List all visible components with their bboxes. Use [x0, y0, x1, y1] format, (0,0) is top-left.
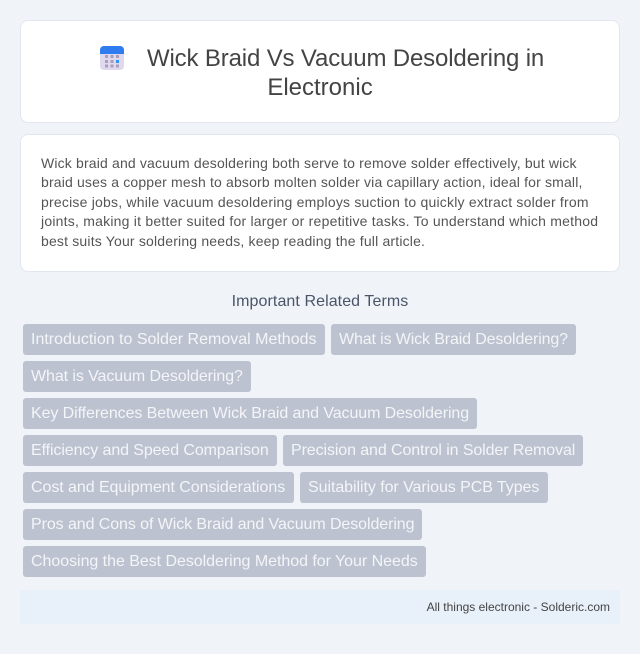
tag: Key Differences Between Wick Braid and Vacuum Desoldering: [31, 405, 469, 422]
tag: [23, 509, 422, 540]
icon: calendar: [100, 46, 124, 70]
tag: [23, 361, 251, 392]
tag: [331, 324, 576, 355]
tag: Precision and Control in Solder Removal: [291, 442, 575, 459]
tag: Pros and Cons of Wick Braid and Vacuum Desoldering: [31, 516, 414, 533]
tag: Introduction to Solder Removal Methods: [31, 331, 316, 348]
heading: related terms: Important Related Terms: [232, 293, 408, 310]
tag: [23, 472, 294, 503]
panel: title header: [20, 20, 620, 123]
intro text: braid uses a copper mesh to absorb molten solder via capillary action, ideal for small,: [41, 174, 583, 190]
tag: Choosing the Best Desoldering Method for Your Needs: [31, 553, 418, 570]
intro text: joints, making it better suited for larger or repetitive tasks. To understand which method: [41, 213, 598, 229]
tag: Cost and Equipment Considerations: [31, 479, 285, 496]
tag: [23, 546, 426, 577]
tag: [23, 324, 325, 355]
intro text: best suits Your soldering needs, keep reading the full article.: [41, 233, 425, 249]
tag: [23, 435, 277, 466]
tag: What is Vacuum Desoldering?: [31, 368, 243, 385]
tag: [23, 398, 477, 429]
title: Wick Braid Vs Vacuum Desoldering in: [147, 45, 544, 72]
title: [147, 45, 544, 101]
title: Electronic: [267, 74, 373, 101]
tag: [300, 472, 548, 503]
intro text: Wick braid and vacuum desoldering both serve to remove solder effectively, but wick: [41, 155, 577, 171]
panel: intro paragraph: [20, 134, 620, 272]
footer: [20, 590, 620, 624]
tag: What is Wick Braid Desoldering?: [339, 331, 568, 348]
tag: [283, 435, 583, 466]
intro text: precise jobs, while vacuum desoldering employs suction to quickly extract solder from: [41, 194, 589, 210]
tag: Efficiency and Speed Comparison: [31, 442, 269, 459]
tag: Suitability for Various PCB Types: [308, 479, 539, 496]
footer text: All things electronic - Solderic.com: [427, 600, 610, 614]
intro text: [40, 155, 598, 249]
